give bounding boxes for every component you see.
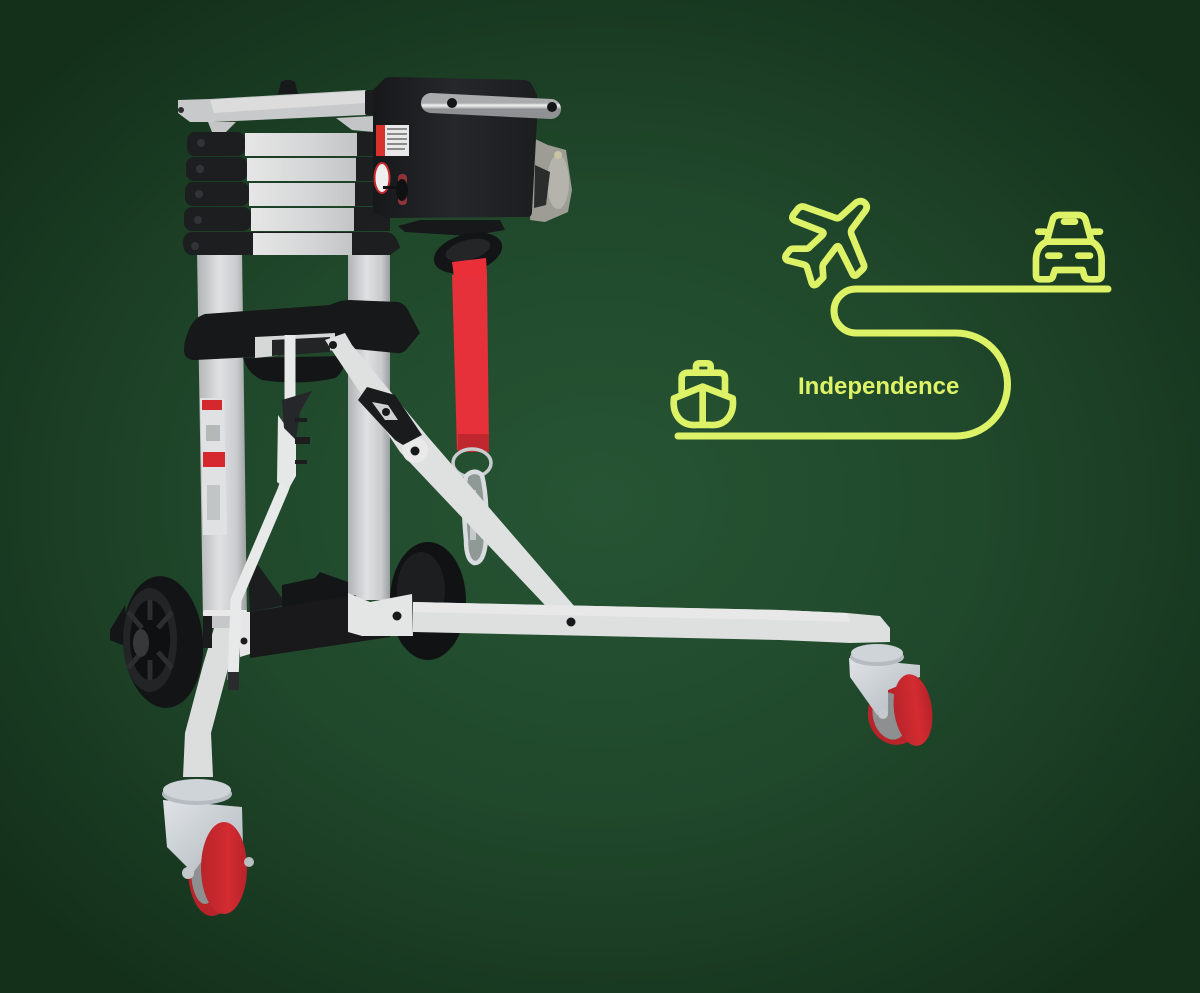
icon: car bbox=[1036, 215, 1102, 279]
rear wheel bbox=[390, 542, 466, 660]
top bar bbox=[178, 80, 400, 132]
round sign and switch bbox=[374, 163, 408, 205]
warning label bbox=[376, 125, 409, 156]
thin front leg bbox=[228, 335, 312, 690]
d-ring and carabiner bbox=[453, 449, 491, 563]
ladder sections bbox=[183, 132, 400, 255]
base frame, black bbox=[248, 565, 390, 658]
right pole bbox=[348, 250, 390, 600]
pole stickers bbox=[200, 398, 227, 535]
product: telescopic lift machine bbox=[110, 77, 937, 916]
base beam bbox=[348, 593, 890, 643]
cushion strap underside bbox=[243, 356, 345, 383]
bracket on cushion bbox=[255, 333, 335, 358]
independence route graphic bbox=[674, 201, 1108, 436]
winch box bbox=[373, 77, 537, 218]
icon: airplane bbox=[785, 201, 867, 285]
left collar bbox=[203, 610, 250, 657]
label: Independence: Independence bbox=[798, 373, 959, 400]
handle bbox=[431, 98, 557, 112]
motor housing bbox=[530, 138, 572, 222]
right caster bbox=[849, 644, 937, 751]
red strap bbox=[452, 258, 489, 452]
left caster bbox=[162, 779, 254, 916]
padded cushion bbox=[184, 300, 420, 360]
winch mount bbox=[398, 220, 507, 280]
icon: ship bbox=[674, 363, 733, 425]
left pole bbox=[197, 250, 247, 620]
large left leg bbox=[183, 628, 234, 777]
diagonal arm bbox=[325, 333, 582, 632]
winding road line bbox=[678, 289, 1108, 436]
front left wheel bbox=[110, 573, 208, 711]
